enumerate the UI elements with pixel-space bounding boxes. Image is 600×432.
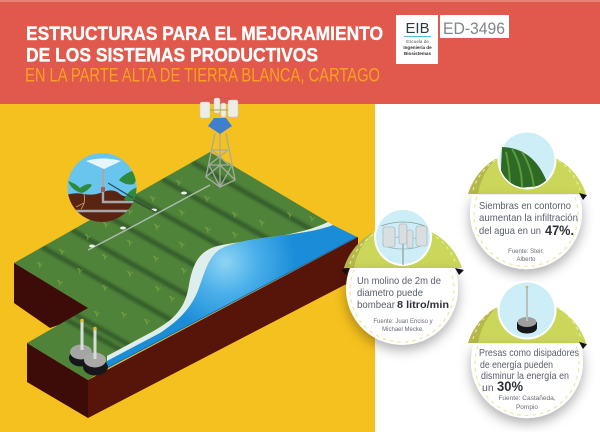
rotor blades [200, 98, 238, 118]
callout text: disminur la energía en [481, 370, 569, 382]
icon: dam [498, 280, 556, 340]
river [107, 225, 357, 368]
crop plants [37, 180, 314, 325]
callout text: diametro puede [357, 287, 423, 299]
sprinklers [89, 192, 187, 248]
river bank [107, 222, 333, 361]
icon: windmill [374, 208, 432, 266]
dam 1 [69, 319, 93, 366]
callout source [498, 395, 556, 411]
callout text: de energía pueden [480, 359, 553, 371]
river front edge [107, 237, 357, 368]
leaves left [68, 181, 92, 193]
rotor rim [203, 98, 236, 101]
soil [68, 190, 136, 222]
title: ESTRUCTURAS PARA EL MEJORAMIENTO [26, 24, 383, 45]
sky [68, 153, 136, 222]
white body [346, 268, 458, 345]
callout text: bombear [357, 299, 395, 311]
logo: EIB: Ingeniería de [403, 45, 432, 50]
logo: EIB [396, 15, 438, 64]
callout source [373, 319, 433, 333]
olive cap [468, 300, 586, 343]
riser and pipes [103, 169, 138, 202]
callout source [508, 249, 544, 263]
black pointer [579, 342, 587, 349]
energy dissipator dams [69, 319, 108, 376]
callout source: Fuente: Steir, [508, 249, 544, 255]
header banner [0, 0, 600, 104]
olive cap [344, 225, 462, 268]
white body [471, 344, 583, 418]
callout source: Fuente: Juan Enciso y [373, 319, 433, 325]
logo: EIB: Biosistemas [404, 51, 431, 56]
callout text: Presas como disipadores [479, 347, 579, 359]
callout text [479, 200, 578, 238]
olive cap [468, 151, 586, 194]
inset: sprinkler cross-section [68, 153, 136, 222]
callout text [357, 275, 449, 311]
windmill tower [200, 98, 238, 187]
callout text [479, 347, 579, 394]
logo: EIB: EIB [406, 20, 430, 37]
logo: EIB: Escuela de [406, 39, 429, 44]
irrigation pipe [88, 185, 210, 250]
dashed ring [350, 270, 454, 342]
white body [470, 195, 582, 269]
callout text: Un molino de 2m de [357, 275, 441, 287]
subtitle: EN LA PARTE ALTA DE TIERRA BLANCA, CARTAGO [25, 66, 380, 86]
dashed ring [474, 197, 578, 266]
lower block front soil wall [88, 237, 358, 418]
water spray [86, 158, 121, 169]
dashed ring [475, 346, 579, 415]
title: DE LOS SISTEMAS PRODUCTIVOS [26, 46, 318, 66]
callout: molino [341, 208, 464, 345]
callout source: Michael Mecke. [382, 327, 424, 333]
callout: siembras [468, 130, 587, 269]
callout: presas [468, 280, 587, 418]
icon: contour field [498, 130, 556, 190]
water tank [208, 118, 232, 134]
dam 2 [83, 327, 108, 376]
crop furrows [40, 160, 314, 351]
green field surface [14, 152, 328, 380]
background: yellow panel [0, 104, 375, 432]
black pointer [455, 268, 464, 275]
callout text: aumentan la infiltración [479, 212, 578, 224]
callout source: Alberto [516, 257, 536, 263]
upper block soil wall [14, 263, 95, 328]
callout text: del agua en un [479, 225, 541, 237]
lattice [206, 133, 235, 187]
document code: ED-3496 [443, 19, 505, 38]
callout text: Siembras en contorno [479, 200, 571, 212]
lower block left soil wall [27, 343, 88, 418]
title [26, 24, 383, 66]
isometric farm block [14, 152, 358, 418]
callout text: 30% [497, 379, 523, 394]
callout source: Fuente: Castañeda, [498, 395, 556, 402]
leaves right [119, 171, 136, 184]
inset connector [133, 200, 155, 212]
callout source: Pompio [516, 404, 538, 411]
callout text: un [482, 382, 494, 394]
black pointer [579, 193, 587, 200]
callout text: 8 litro/min [397, 299, 449, 311]
callout text: 47%. [545, 223, 574, 238]
